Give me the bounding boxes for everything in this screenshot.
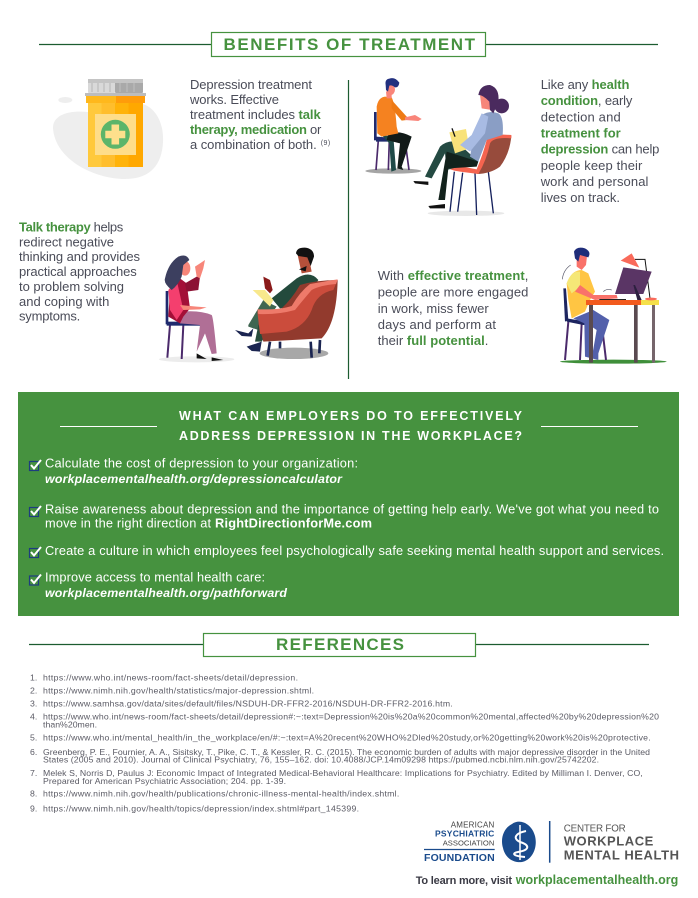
reference list: 8.	[30, 789, 37, 799]
reference list: 7.	[30, 768, 37, 778]
panel heading	[179, 409, 523, 443]
logo: american psychiatric association foundation: PSYCHIATRIC	[435, 829, 494, 839]
reference list: https://www.nimh.nih.gov/health/publications/chronic-illness-mental-health/index.shtml.	[43, 789, 399, 799]
illustration: two people in counselling on chairs	[365, 78, 511, 216]
heading: references: REFERENCES	[276, 635, 404, 654]
text block: talk therapy: redirect negative	[19, 235, 114, 250]
text block: health condition: condition, early	[541, 93, 633, 108]
text block: talk therapy: Talk therapy helps	[19, 220, 124, 235]
logo: center for workplace mental health: WORKPLACE	[564, 834, 654, 849]
text block: health condition: depression can help	[541, 142, 659, 157]
call to action: learn more: To learn more, visit	[416, 875, 512, 887]
text block: effective treatment: With effective treatment,	[378, 268, 528, 283]
text block: effective treatment: people are more engaged	[378, 284, 528, 299]
text block: talk therapy: practical approaches	[19, 264, 137, 279]
logo: american psychiatric association foundation	[424, 820, 495, 864]
text block: treatment works: therapy, medication or	[190, 122, 322, 137]
reference list: Greenberg, P. E., Fournier, A. A., Sisitsky, T., Pike, C. T., & Kessler, R. C. (2015). The economic burden of adults with major depressive disorder in the United	[43, 747, 650, 757]
text block: effective treatment	[378, 268, 528, 348]
text block: treatment works: treatment includes talk	[190, 107, 321, 122]
text block: talk therapy	[19, 220, 140, 324]
text block: treatment works: a combination of both.	[190, 137, 317, 152]
reference list: 4.	[30, 712, 37, 722]
reference list: https://www.nimh.nih.gov/health/statistics/major-depression.shtml.	[43, 686, 314, 696]
reference list: https://www.samhsa.gov/data/sites/default/files/NSDUH-DR-FFR2-2016/NSDUH-DR-FFR2-2016.htm.	[43, 699, 453, 709]
text block: talk therapy: to problem solving	[19, 279, 124, 294]
reference list: States (2005 and 2010). Journal of Clinical Psychiatry, 76, 155–162. doi: 10.4088/JCP.14m09298 https://pubmed.ncbi.nlm.nih.gov/25742202.	[43, 755, 599, 765]
call to action: learn more	[416, 873, 678, 887]
checklist item: improve access: Improve access to mental health care:	[45, 570, 265, 585]
reference list: 1.	[30, 673, 37, 683]
panel: what employers can do	[18, 392, 679, 616]
text block: health condition: work and personal	[540, 174, 649, 189]
reference list: https://www.nimh.nih.gov/health/topics/depression/index.shtml#part_145399.	[43, 804, 359, 814]
checklist item: calculate cost: workplacementalhealth.org/depressioncalculator	[45, 472, 343, 486]
text block: treatment works: Depression treatment	[190, 77, 312, 92]
text block: health condition: people keep their	[541, 158, 643, 173]
text block: treatment works: (9)	[321, 140, 330, 147]
text block: health condition	[540, 77, 659, 205]
illustration: therapist in armchair with client	[159, 248, 338, 362]
reference list: https://www.who.int/mental_health/in_the_workplace/en/#:~:text=A%20recent%20WHO%2Dled%20study,or%20getting%20work%20is%20protective.	[43, 733, 651, 743]
icon: medicine bottle	[53, 79, 163, 179]
checklist item: create a culture: Create a culture in which employees feel psychologically safe seeking mental health support and services.	[45, 543, 664, 558]
reference list	[30, 673, 659, 814]
icon: brain and staff emblem	[502, 822, 536, 862]
heading: benefits of treatment	[39, 32, 658, 56]
call to action: learn more: workplacementalhealth.org	[515, 873, 678, 887]
text block: effective treatment: in work, miss fewer	[378, 301, 489, 316]
logo: center for workplace mental health: MENTAL HEALTH	[564, 848, 679, 863]
checklist item: raise awareness: move in the right direction at RightDirectionforMe.com	[45, 516, 372, 531]
text block: effective treatment: days and perform at	[378, 317, 496, 332]
reference list: https://www.who.int/news-room/fact-sheets/detail/depression.	[43, 673, 298, 683]
reference list: Melek S, Norris D, Paulus J: Economic Impact of Integrated Medical-Behavioral Healthcare: Implications for Psychiatry. Edited by Milliman I. Denver, CO,	[43, 768, 643, 778]
reference list: 9.	[30, 804, 37, 814]
text block: talk therapy: and coping with	[19, 294, 109, 309]
reference list: than%20men.	[43, 720, 97, 730]
text block: treatment works	[189, 77, 330, 152]
logo: center for workplace mental health: CENTER FOR	[564, 824, 626, 835]
checklist item: calculate cost: Calculate the cost of depression to your organization:	[45, 456, 358, 471]
reference list: 6.	[30, 747, 37, 757]
checklist item: calculate cost	[30, 456, 358, 486]
reference list: https://www.who.int/news-room/fact-sheets/detail/depression#:~:text=Depression%20is%20a%20common%20mental,affected%20by%20depression%20	[43, 712, 659, 722]
text block: talk therapy: thinking and provides	[19, 249, 140, 264]
checklist item: improve access	[30, 570, 287, 600]
heading: benefits of treatment: BENEFITS OF TREATMENT	[224, 35, 476, 54]
text block: health condition: Like any health	[541, 77, 629, 92]
text block: health condition: treatment for	[541, 126, 621, 141]
logo: american psychiatric association foundation: ASSOCIATION	[443, 838, 494, 847]
reference list: 3.	[30, 699, 37, 709]
panel heading: WHAT CAN EMPLOYERS DO TO EFFECTIVELY	[179, 409, 523, 423]
logo: center for workplace mental health	[564, 824, 679, 863]
illustration: man working at a desk	[560, 248, 667, 364]
text block: effective treatment: their full potential.	[378, 333, 488, 348]
panel heading: ADDRESS DEPRESSION IN THE WORKPLACE?	[179, 429, 522, 443]
text block: health condition: detection and	[541, 110, 621, 125]
logo: american psychiatric association foundation: FOUNDATION	[424, 852, 495, 864]
text block: treatment works: works. Effective	[189, 92, 279, 107]
reference list: 5.	[30, 733, 37, 743]
text block: health condition: lives on track.	[541, 190, 620, 205]
logo: american psychiatric association foundation: AMERICAN	[451, 820, 495, 829]
checklist item: raise awareness	[30, 502, 659, 531]
reference list: Prepared for American Psychiatric Association; 204. pp. 1-39.	[43, 776, 286, 786]
text block: talk therapy: symptoms.	[19, 309, 80, 324]
checklist item: improve access: workplacementalhealth.org/pathforward	[45, 586, 287, 600]
heading: references	[29, 634, 649, 656]
checklist item: raise awareness: Raise awareness about depression and the importance of getting help early. We've got what you need to	[45, 502, 659, 516]
reference list: 2.	[30, 686, 37, 696]
